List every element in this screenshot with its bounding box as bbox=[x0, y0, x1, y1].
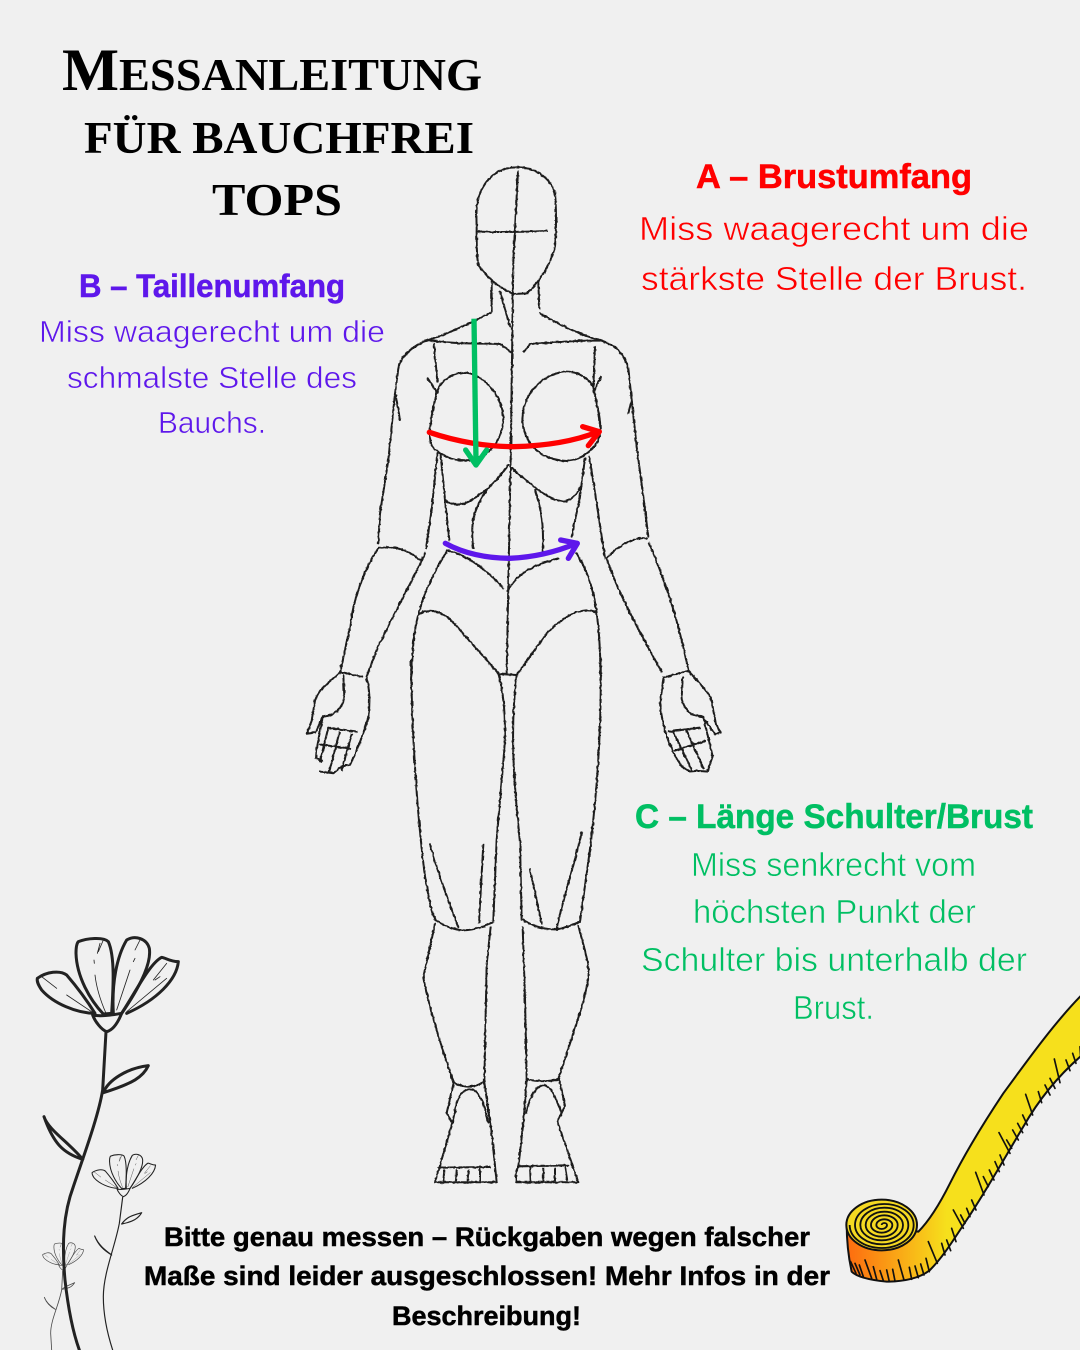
text block: B waist: B – Taillenumfang bbox=[79, 268, 345, 304]
body figure sketch: legs and hands bbox=[307, 660, 721, 1182]
text block: C length: Miss senkrecht vom bbox=[691, 846, 976, 883]
icon: flowers bbox=[37, 938, 178, 1350]
small flower bbox=[43, 1243, 84, 1350]
text block: C length: C – Länge Schulter/Brust bbox=[635, 798, 1033, 836]
text block: A bust: Miss waagerecht um die bbox=[639, 210, 1029, 247]
arrow: A bust (red) bbox=[429, 427, 599, 447]
tape ticks bbox=[851, 1047, 1080, 1282]
footer note: Bitte genau messen – Rückgaben wegen falscher bbox=[164, 1222, 810, 1252]
text block: A bust: stärkste Stelle der Brust. bbox=[641, 260, 1027, 297]
icon: measuring tape bbox=[846, 993, 1080, 1282]
footer note: Beschreibung! bbox=[392, 1301, 581, 1331]
text block: A bust bbox=[639, 158, 1029, 297]
title bbox=[62, 37, 482, 225]
tape roll spiral bbox=[846, 1200, 917, 1250]
text block: B waist bbox=[39, 268, 385, 440]
text block: C length: Brust. bbox=[793, 989, 874, 1026]
footer note bbox=[144, 1222, 830, 1331]
title: TOPS bbox=[212, 174, 342, 225]
text block: B waist: schmalste Stelle des bbox=[67, 360, 357, 395]
tape band bbox=[847, 993, 1080, 1282]
text block: C length: höchsten Punkt der bbox=[693, 893, 976, 930]
medium flower bbox=[92, 1154, 156, 1350]
body figure sketch: upper body bbox=[340, 167, 688, 680]
footer note: Maße sind leider ausgeschlossen! Mehr Infos in der bbox=[144, 1261, 830, 1291]
title: FÜR BAUCHFREI bbox=[84, 112, 474, 163]
text block: C length: Schulter bis unterhalb der bbox=[641, 941, 1027, 978]
text block: B waist: Miss waagerecht um die bbox=[39, 314, 385, 349]
arrow: B waist (purple) bbox=[445, 540, 577, 558]
arrow: C length (green) bbox=[466, 319, 487, 465]
text block: C length bbox=[635, 798, 1033, 1026]
title: MESSANLEITUNG bbox=[62, 37, 482, 103]
text block: B waist: Bauchs. bbox=[158, 405, 266, 440]
text block: A bust: A – Brustumfang bbox=[696, 158, 972, 196]
large flower bbox=[37, 938, 178, 1350]
